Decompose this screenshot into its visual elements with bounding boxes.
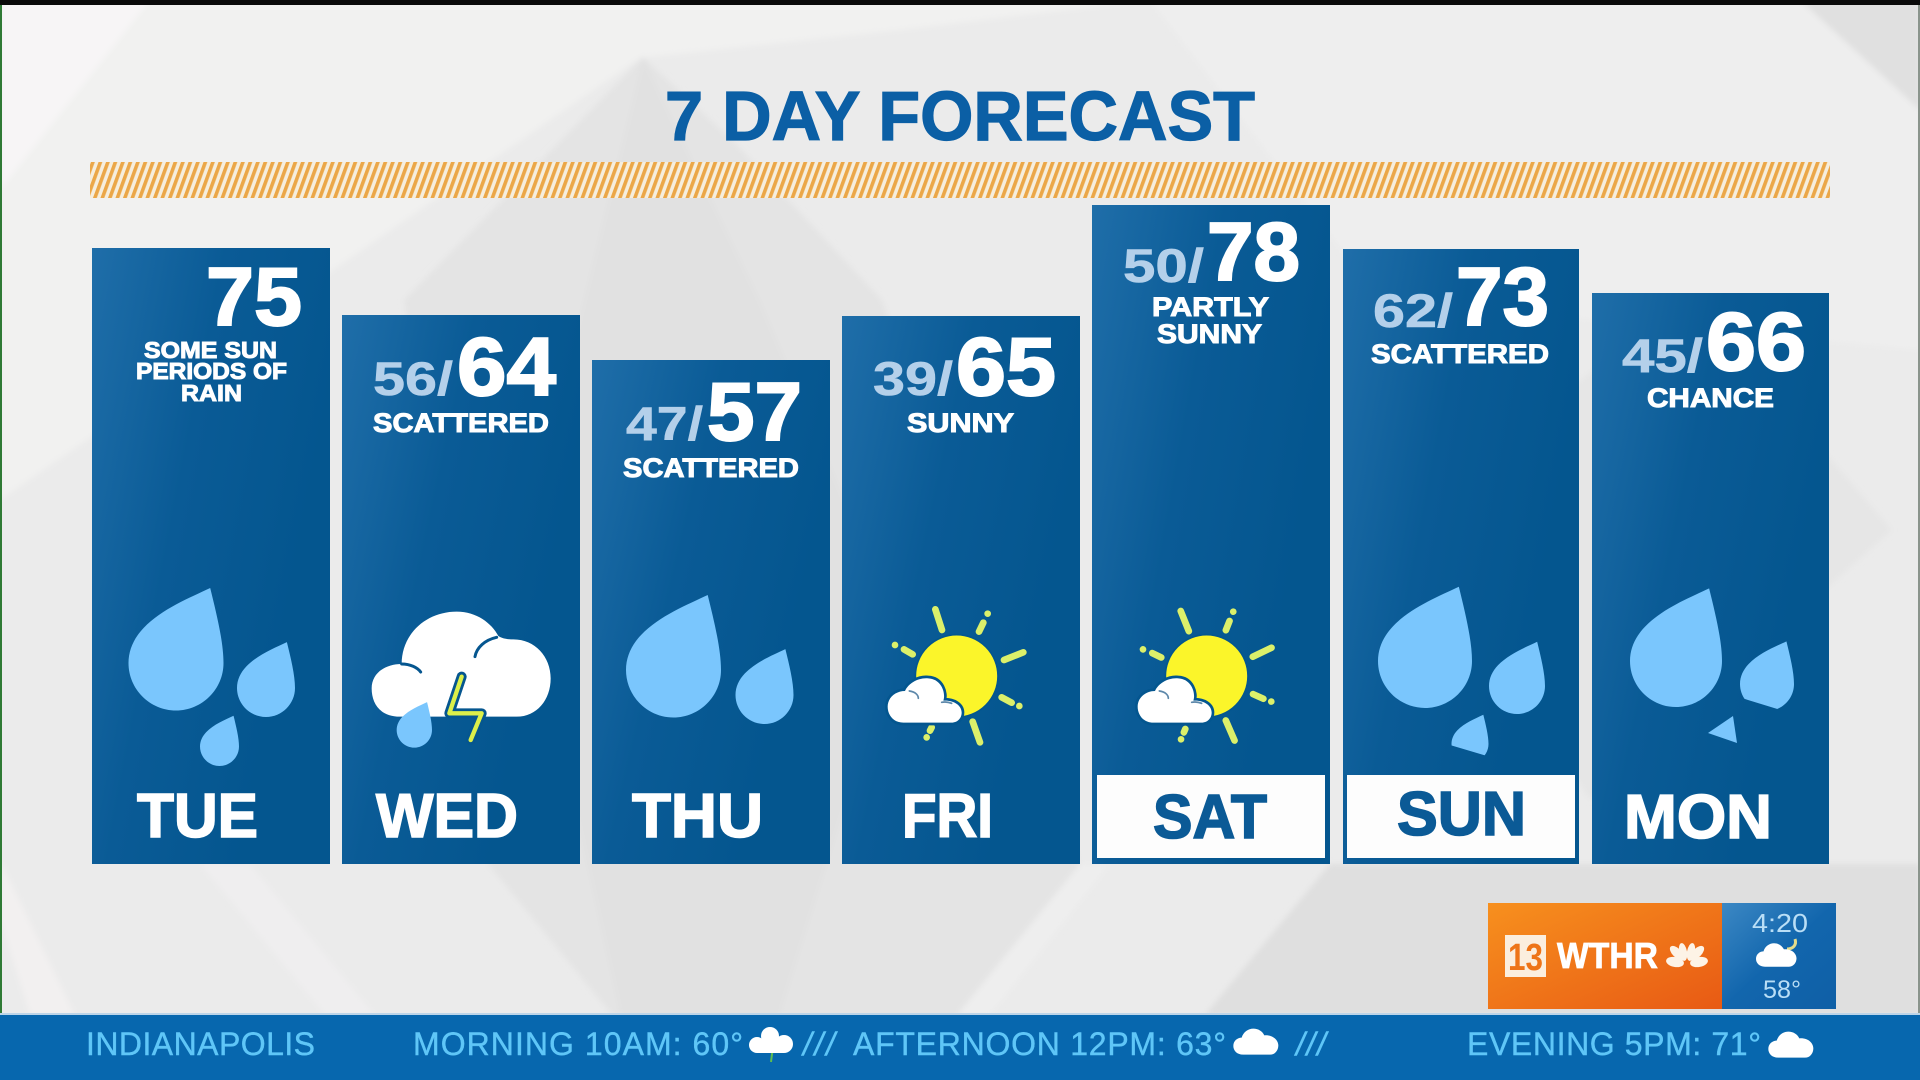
station logo bug [1488, 903, 1836, 1009]
condition text: PERIODS OF [136, 358, 287, 384]
bottom ticker [0, 1013, 1920, 1080]
column [1343, 249, 1579, 864]
icon: sun behind cloud [1138, 605, 1278, 746]
panel: Monday [1592, 293, 1829, 864]
clock time: 4:20 [1752, 908, 1808, 938]
condition text: SCATTERED [623, 453, 799, 483]
high temperature: 73 [1456, 250, 1549, 343]
high temperature: 75 [206, 250, 302, 343]
day label: SAT [1153, 783, 1267, 852]
separator: /// [1294, 1026, 1329, 1062]
high temperature: 66 [1706, 295, 1806, 388]
condition text: SUNNY [907, 408, 1014, 438]
condition text: CHANCE [1647, 383, 1774, 413]
condition text [1152, 292, 1269, 349]
condition text: SCATTERED [1371, 339, 1549, 369]
WTHR wordmark: WTHR [1557, 935, 1658, 976]
icon: rain drops [1378, 587, 1545, 762]
panel: Saturday [1092, 205, 1330, 864]
column [92, 248, 330, 864]
day label: TUE [137, 782, 258, 851]
evening forecast: EVENING 5PM: 71° [1467, 1026, 1761, 1062]
channel 13 box: 13 [1508, 937, 1543, 979]
condition text: SOME SUN [144, 337, 277, 363]
icon: night cloud [1756, 939, 1796, 967]
day label box [1097, 775, 1325, 858]
column [1592, 293, 1829, 864]
day label: WED [376, 782, 518, 851]
panel: Wednesday [342, 315, 580, 864]
low temperature: 39/ [873, 352, 953, 405]
high temperature: 78 [1207, 205, 1300, 298]
column [1092, 205, 1330, 864]
icon: cloud [1768, 1032, 1813, 1058]
icon: thunderstorm cloud [372, 612, 551, 748]
day label: FRI [902, 782, 993, 851]
low temperature: 56/ [373, 352, 453, 405]
day label: THU [632, 782, 763, 851]
icon: sun behind cloud [888, 609, 1023, 742]
low temperature: 45/ [1622, 329, 1703, 382]
column [342, 315, 580, 864]
panel: Sunday [1343, 249, 1579, 864]
condition text: PARTLY [1152, 292, 1269, 322]
column [842, 316, 1080, 864]
morning forecast: MORNING 10AM: 60° [413, 1026, 743, 1062]
NBC peacock [1665, 942, 1709, 968]
time and temperature panel [1722, 903, 1836, 1009]
low temperature: 47/ [626, 397, 703, 450]
day label box [1347, 775, 1575, 858]
orange hatched divider [90, 162, 1830, 198]
condition text [136, 337, 287, 406]
day label: MON [1624, 783, 1772, 852]
high temperature: 64 [457, 320, 556, 413]
city name: INDIANAPOLIS [86, 1026, 315, 1062]
icon: rain drops [128, 588, 295, 766]
high temperature: 57 [707, 365, 802, 458]
low temperature: 50/ [1123, 239, 1204, 292]
icon: cloud [1233, 1029, 1278, 1055]
icon: rain drops [626, 595, 794, 724]
condition text: SCATTERED [373, 408, 549, 438]
condition text: RAIN [181, 380, 242, 406]
panel: Friday [842, 316, 1080, 864]
current temperature: 58° [1763, 976, 1801, 1004]
orange logo panel [1488, 903, 1722, 1009]
high temperature: 65 [956, 320, 1056, 413]
icon: storm cloud [749, 1027, 793, 1062]
condition text: SUNNY [1157, 319, 1262, 349]
title: 7 DAY FORECAST [665, 77, 1255, 155]
low temperature: 62/ [1373, 284, 1453, 337]
column [592, 360, 830, 864]
separator: /// [801, 1026, 838, 1062]
day label: SUN [1397, 780, 1526, 849]
afternoon forecast: AFTERNOON 12PM: 63° [853, 1026, 1226, 1062]
panel: Thursday [592, 360, 830, 864]
panel: Tuesday [92, 248, 330, 864]
icon: rain drops [1630, 588, 1794, 743]
